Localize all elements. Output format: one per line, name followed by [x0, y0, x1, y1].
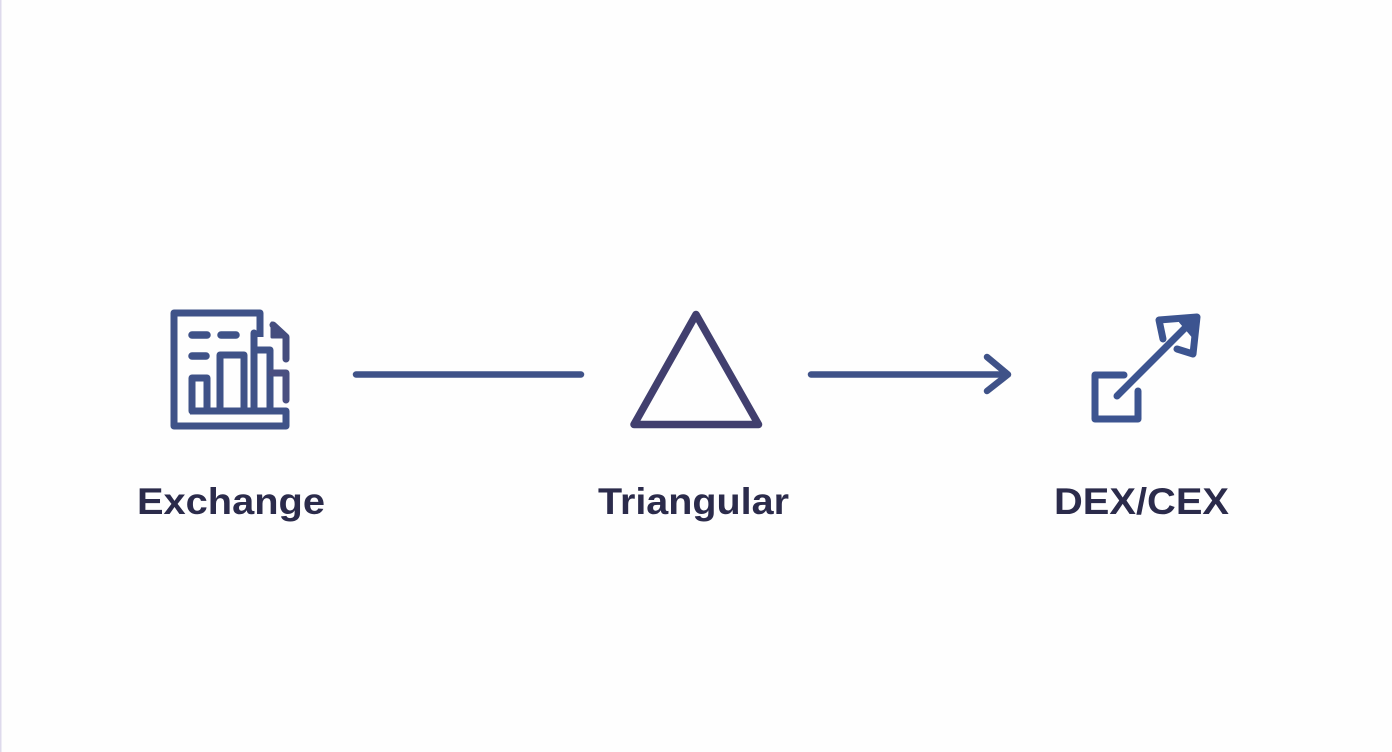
icon: diagonal expand arrow from square	[1095, 317, 1197, 419]
label: DEX/CEX: DEX/CEX	[1054, 481, 1229, 522]
connector line	[356, 371, 581, 378]
label: Exchange: Exchange	[137, 481, 325, 522]
icon: exchange document with bar chart	[174, 313, 286, 426]
icon: triangle	[634, 314, 758, 424]
arrow	[811, 357, 1008, 391]
label: Triangular: Triangular	[598, 481, 789, 522]
